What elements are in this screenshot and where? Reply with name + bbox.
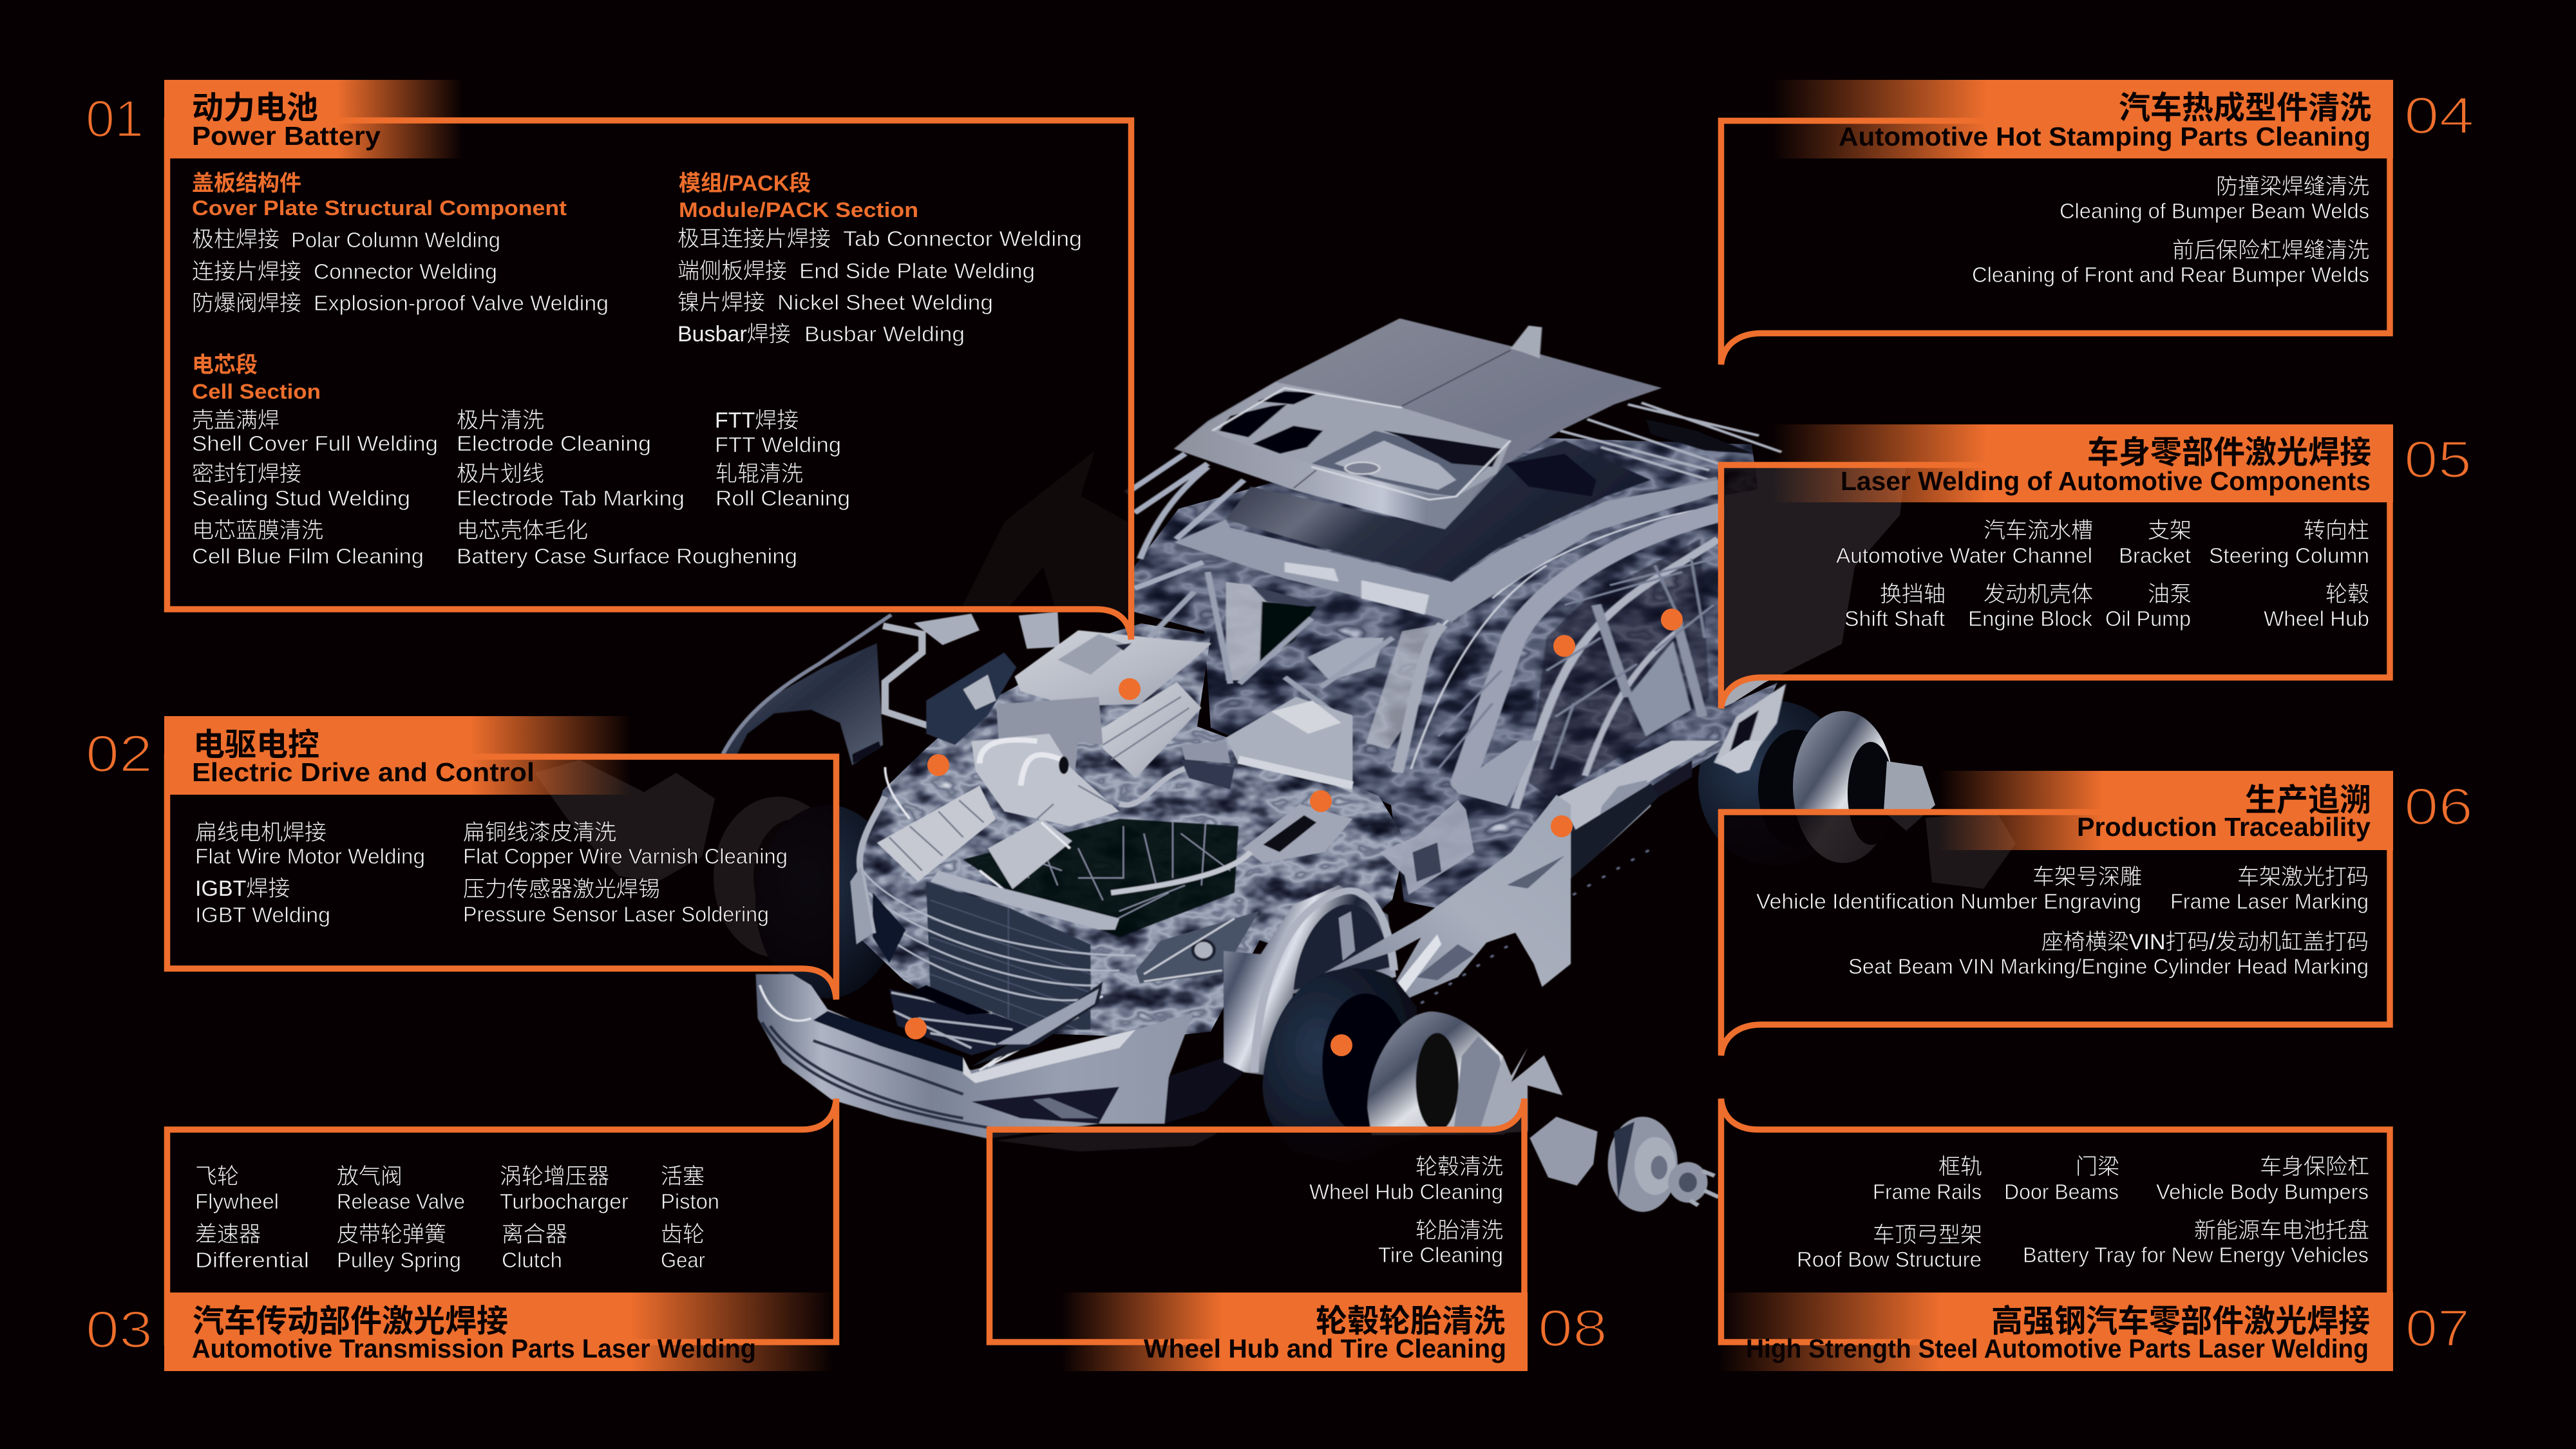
text block: drive items: 扁铜线漆皮清洗 <box>463 820 616 845</box>
front wheel and side fender <box>1224 741 1762 1212</box>
wheel rim <box>1367 1012 1519 1135</box>
text block: module pack: Nickel Sheet Welding <box>777 290 993 314</box>
header 01: Power Battery <box>192 121 381 151</box>
text block: steel items: Battery Tray for New Energy Vehicles <box>2023 1243 2369 1267</box>
text block: cell section: 极片划线 <box>457 462 544 486</box>
header 08: Wheel Hub and Tire Cleaning <box>1144 1334 1506 1363</box>
text block: module pack: Module/PACK Section <box>679 198 918 222</box>
ghost parts behind panels <box>535 451 2016 958</box>
front section: engine, grille and bumper <box>723 612 1352 1151</box>
header 05 <box>1772 424 2393 502</box>
number 04: 04 <box>2404 87 2474 145</box>
header 08: 轮毂轮胎清洗 <box>1316 1304 1505 1339</box>
brake disc <box>1608 1117 1678 1212</box>
lower structure <box>1164 1056 1242 1124</box>
text block: cleaning items <box>1972 175 2369 287</box>
text block: cell section: 电芯壳体毛化 <box>457 518 588 543</box>
text block: cleaning items: Cleaning of Front and Rear Bumper Welds <box>1972 263 2369 287</box>
text block: steel items <box>1797 1155 2369 1271</box>
under-bumper shadow <box>996 1128 1218 1151</box>
header 05: Laser Welding of Automotive Components <box>1841 466 2371 496</box>
left edge of hood frame <box>860 797 885 933</box>
text block: cover plate: Explosion-proof Valve Welding <box>314 291 609 315</box>
text block: drive items: Flat Wire Motor Welding <box>195 844 425 868</box>
text block: component items: Bracket <box>2119 544 2191 567</box>
brake caliper <box>1530 1117 1598 1186</box>
text block: module pack: 模组/PACK段 <box>679 171 811 196</box>
text block: cover plate: Cover Plate Structural Component <box>192 196 567 220</box>
text block: component items: Engine Block <box>1968 607 2092 630</box>
text block: module pack <box>677 171 1082 346</box>
text block: cell section: FTT Welding <box>715 433 841 457</box>
text block: wheel items: 轮毂清洗 <box>1416 1155 1503 1179</box>
header 04: Automotive Hot Stamping Parts Cleaning <box>1839 122 2371 151</box>
text block: cell section: 极片清洗 <box>457 408 544 433</box>
text block: transmission items: 活塞 <box>661 1164 705 1189</box>
rear wheel <box>1698 701 1935 866</box>
text block: cell section: 密封钉焊接 <box>192 462 301 486</box>
hub <box>1668 1162 1719 1206</box>
header 08 <box>1061 1293 1528 1371</box>
panel 08: wheel hub and tire cleaning <box>989 1099 1607 1371</box>
text block: module pack: Busbar Welding <box>804 322 965 346</box>
text block: traceability items: Vehicle Identification Number Engraving <box>1756 889 2141 913</box>
text block: transmission items: Turbocharger <box>500 1189 629 1213</box>
text block: cell section: Cell Blue Film Cleaning <box>192 544 424 568</box>
text block: component items: Automotive Water Channel <box>1836 544 2092 567</box>
text block: transmission items: 涡轮增压器 <box>500 1164 609 1189</box>
text block: module pack: Tab Connector Welding <box>843 227 1082 251</box>
text block: steel items: Door Beams <box>2004 1180 2119 1204</box>
text block: transmission items: Gear <box>661 1248 705 1272</box>
text block: transmission items: Flywheel <box>195 1189 279 1213</box>
far tire <box>755 805 900 998</box>
header 03: Automotive Transmission Parts Laser Welding <box>192 1334 756 1363</box>
text block: cell section: Electrode Tab Marking <box>457 486 685 510</box>
text block: component items: Shift Shaft <box>1844 607 1945 630</box>
panel 02: electric drive and control <box>86 716 836 999</box>
text block: drive items <box>195 820 788 927</box>
text block: traceability items: Seat Beam VIN Marking/Engine Cylinder Head Marking <box>1848 954 2369 978</box>
text block: wheel items: Wheel Hub Cleaning <box>1309 1180 1503 1204</box>
text block: transmission items: 齿轮 <box>661 1222 705 1247</box>
tire <box>1263 968 1421 1164</box>
text block: cover plate <box>192 171 609 316</box>
lower grille <box>889 985 1045 1056</box>
text block: transmission items: 差速器 <box>195 1222 261 1247</box>
text block: steel items: Roof Bow Structure <box>1797 1247 1982 1271</box>
dark engine underside <box>963 819 1238 937</box>
text block: cover plate: 防爆阀焊接 <box>192 291 301 316</box>
header 07 <box>1718 1293 2393 1371</box>
header 04 <box>1772 80 2393 158</box>
text block: component items: 转向柱 <box>2304 518 2369 543</box>
crossmember <box>931 871 1119 930</box>
text block: module pack: 端侧板焊接 <box>677 259 787 283</box>
text block: cell section: Roll Cleaning <box>715 486 850 510</box>
text block: cell section <box>192 353 850 568</box>
headlight <box>1136 911 1259 983</box>
text block: traceability items <box>1756 865 2369 978</box>
text block: component items: 轮毂 <box>2325 582 2369 607</box>
text block: cleaning items: 前后保险杠焊缝清洗 <box>2172 238 2369 263</box>
text block: cover plate: 盖板结构件 <box>192 171 301 196</box>
text block: cell section: 壳盖满焊 <box>192 408 279 433</box>
panel 06: production traceability <box>1721 771 2473 1056</box>
number 05: 05 <box>2404 431 2472 489</box>
detached front fender <box>723 615 891 765</box>
text block: traceability items: 车架激光打码 <box>2237 865 2369 889</box>
header 03 <box>164 1293 833 1371</box>
panel 01: power battery <box>86 80 1131 639</box>
number 01: 01 <box>86 90 144 148</box>
text block: transmission items: 飞轮 <box>195 1164 239 1189</box>
engine cover <box>1014 630 1212 706</box>
text block: component items: 汽车流水槽 <box>1984 518 2093 543</box>
text block: transmission items: Release Valve <box>337 1189 465 1213</box>
header 02: Electric Drive and Control <box>192 757 535 787</box>
text block: cleaning items: Cleaning of Bumper Beam Welds <box>2060 199 2369 223</box>
chrome texture: cabin and underbody <box>1134 438 1777 914</box>
header 01: 动力电池 <box>192 91 318 126</box>
panel 07: high strength steel parts <box>1718 1099 2470 1371</box>
header 02 <box>164 716 631 795</box>
text block: steel items: Frame Rails <box>1873 1180 1982 1204</box>
text block: transmission items: 离合器 <box>502 1222 567 1247</box>
text block: component items: 油泵 <box>2148 582 2192 607</box>
text block: drive items: IGBT焊接 <box>195 876 290 901</box>
text block: cover plate: Polar Column Welding <box>291 228 500 252</box>
header 01 <box>164 80 462 158</box>
text block: component items: 支架 <box>2148 518 2192 543</box>
number 08: 08 <box>1538 1300 1607 1358</box>
text block: steel items: 车身保险杠 <box>2260 1155 2369 1179</box>
text block: wheel items: Tire Cleaning <box>1378 1243 1503 1267</box>
chrome texture: engine bay <box>855 623 1406 1037</box>
text block: wheel items: 轮胎清洗 <box>1416 1218 1503 1243</box>
text block: cell section: Cell Section <box>192 380 321 403</box>
text block: steel items: 框轨 <box>1938 1155 1982 1179</box>
text block: component items: 换挡轴 <box>1880 582 1946 607</box>
text block: transmission items: Clutch <box>502 1248 562 1272</box>
number 03: 03 <box>86 1301 153 1359</box>
header 02: 电驱电控 <box>193 728 319 762</box>
number 02: 02 <box>86 725 153 783</box>
text block: cell section: Sealing Stud Welding <box>192 486 410 510</box>
text block: cover plate: 极柱焊接 <box>192 227 279 252</box>
text block: cell section: 电芯段 <box>192 353 258 377</box>
side fender <box>1320 795 1571 1001</box>
number 06: 06 <box>2404 778 2473 836</box>
tire opening <box>1322 994 1408 1135</box>
header 05: 车身零部件激光焊接 <box>2087 435 2371 470</box>
panel 05: laser welding of components <box>1721 424 2472 708</box>
text block: component items: Wheel Hub <box>2264 607 2369 630</box>
panel 04: hot stamping parts cleaning <box>1721 80 2474 365</box>
text block: cover plate: 连接片焊接 <box>192 260 301 284</box>
text block: module pack: End Side Plate Welding <box>799 259 1035 283</box>
text block: drive items: Pressure Sensor Laser Soldering <box>463 902 769 926</box>
header 03: 汽车传动部件激光焊接 <box>193 1304 508 1339</box>
grille arcs <box>860 867 1136 1000</box>
text block: steel items: 车顶弓型架 <box>1873 1223 1982 1247</box>
text block: component items: 发动机壳体 <box>1984 582 2093 607</box>
right side manifold and pipe <box>1111 697 1352 893</box>
text block: cleaning items: 防撞梁焊缝清洗 <box>2216 175 2369 199</box>
header 04: 汽车热成型件清洗 <box>2119 91 2371 126</box>
text block: cover plate: Connector Welding <box>314 260 497 283</box>
pipe and reservoir <box>883 612 1059 745</box>
panel 03: transmission parts <box>86 1099 836 1371</box>
text block: wheel items <box>1309 1155 1503 1267</box>
text block: steel items: 门梁 <box>2076 1155 2119 1179</box>
text block: transmission items: Differential <box>195 1248 309 1272</box>
header 07: 高强钢汽车零部件激光焊接 <box>1991 1304 2370 1339</box>
header 06: Production Traceability <box>2077 812 2371 842</box>
text block: component items <box>1836 518 2369 630</box>
text block: transmission items: 皮带轮弹簧 <box>337 1222 446 1247</box>
text block: cell section: Shell Cover Full Welding <box>192 431 438 455</box>
text block: cell section: 轧辊清洗 <box>715 462 803 486</box>
text block: cell section: FTT焊接 <box>715 408 799 433</box>
text block: transmission items: 放气阀 <box>337 1164 402 1189</box>
header 07: High Strength Steel Automotive Parts Laser Welding <box>1746 1334 2369 1363</box>
text block: drive items: 扁线电机焊接 <box>195 820 327 845</box>
header 06 <box>1938 771 2393 850</box>
text block: transmission items: Piston <box>661 1189 719 1213</box>
text block: cell section: Battery Case Surface Roughening <box>457 544 797 568</box>
cabin structure <box>1126 318 1786 809</box>
text block: steel items: 新能源车电池托盘 <box>2194 1218 2369 1243</box>
illustration: exploded chrome car body <box>535 318 2016 1212</box>
front bumper <box>755 974 1193 1139</box>
text block: module pack: 镍片焊接 <box>677 290 765 315</box>
text block: drive items: Flat Copper Wire Varnish Cleaning <box>463 844 788 868</box>
text block: cell section: 电芯蓝膜清洗 <box>192 518 323 543</box>
text block: steel items: Vehicle Body Bumpers <box>2156 1180 2369 1204</box>
text block: traceability items: Frame Laser Marking <box>2170 889 2369 913</box>
engine block <box>1099 682 1202 778</box>
text block: drive items: 压力传感器激光焊锡 <box>463 877 660 902</box>
text block: transmission items: Pulley Spring <box>337 1248 461 1272</box>
text block: traceability items: 车架号深雕 <box>2032 865 2142 889</box>
text block: cell section: Electrode Cleaning <box>457 431 651 455</box>
radiator <box>926 882 1090 1030</box>
text block: traceability items: 座椅横梁VIN打码/发动机缸盖打码 <box>2041 930 2369 954</box>
marker dots on the car <box>905 609 1683 1056</box>
intake ribs <box>877 786 996 882</box>
text block: module pack: Busbar焊接 <box>677 322 791 346</box>
header 06: 生产追溯 <box>2245 783 2371 818</box>
text block: drive items: IGBT Welding <box>195 903 330 927</box>
main sill rail and panels above sill <box>1379 741 1762 895</box>
suspension arm <box>1479 1048 1562 1135</box>
text block: module pack: 极耳连接片焊接 <box>677 227 831 251</box>
number 07: 07 <box>2405 1300 2470 1358</box>
text block: transmission items <box>195 1164 719 1272</box>
wheel arch <box>1224 885 1396 1075</box>
text block: component items: Oil Pump <box>2105 607 2191 630</box>
underside clips <box>1421 849 1651 1003</box>
text block: component items: Steering Column <box>2209 544 2369 567</box>
